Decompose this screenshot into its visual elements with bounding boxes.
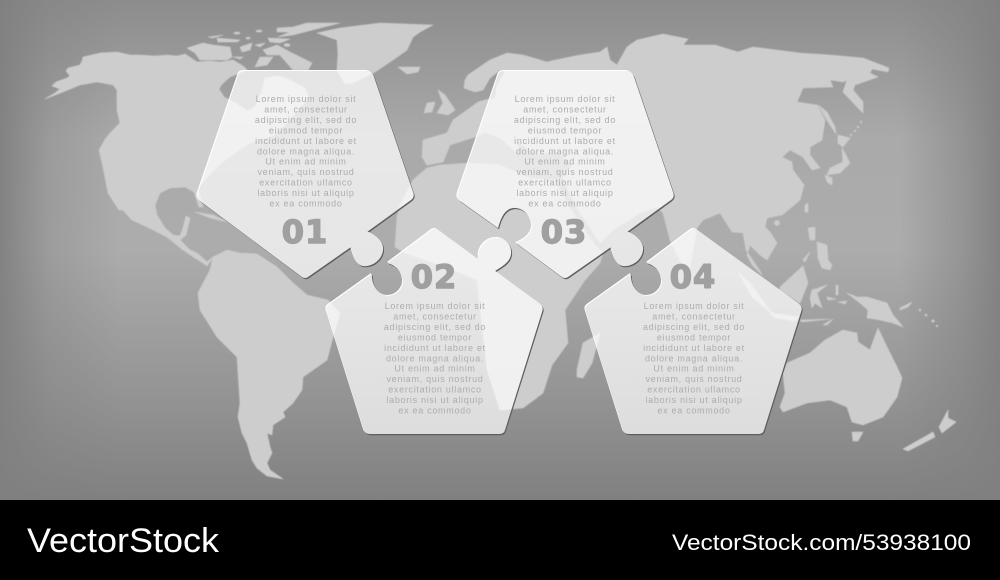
text block 02: ex ea commodo: [398, 406, 472, 416]
text block 03: ex ea commodo: [528, 198, 602, 208]
text block 01: amet, consectetur: [264, 104, 348, 114]
text block 03: Ut enim ad minim: [524, 157, 606, 167]
text block 04: eiusmod tempor: [657, 332, 731, 342]
text block 04: adipiscing elit, sed do: [643, 322, 745, 332]
puzzle piece 03: [456, 70, 675, 279]
text block 03: amet, consectetur: [523, 104, 607, 114]
text block 03: veniam, quis nostrud: [516, 167, 614, 177]
text block 02: incididunt ut labore et: [384, 343, 486, 353]
text block 01: laboris nisi ut aliquip: [257, 188, 355, 198]
map: Iceland: [398, 67, 420, 74]
map: Caribbean islands: [195, 212, 227, 222]
number 01: 01: [282, 213, 328, 251]
text block 04: laboris nisi ut aliquip: [645, 395, 743, 405]
text block 02: laboris nisi ut aliquip: [386, 395, 484, 405]
text block 02: amet, consectetur: [393, 311, 477, 321]
text block 02: adipiscing elit, sed do: [384, 322, 486, 332]
text block 03: laboris nisi ut aliquip: [516, 188, 614, 198]
text block 01: incididunt ut labore et: [255, 136, 357, 146]
text block 04: ex ea commodo: [657, 406, 731, 416]
text block 04: exercitation ullamco: [647, 385, 741, 395]
number 02: 02: [411, 258, 457, 296]
text block 01: eiusmod tempor: [269, 125, 343, 135]
puzzle piece 02: [325, 228, 544, 435]
text block 01: Lorem ipsum dolor sit: [256, 94, 356, 104]
text block 02: eiusmod tempor: [398, 332, 472, 342]
text block 01: Ut enim ad minim: [265, 157, 347, 167]
text block 04: Ut enim ad minim: [653, 364, 735, 374]
text block 02: Lorem ipsum dolor sit: [385, 301, 485, 311]
text block 04: veniam, quis nostrud: [645, 374, 743, 384]
text block 04: incididunt ut labore et: [643, 343, 745, 353]
map: Tasmania: [852, 432, 863, 441]
text block 02: Ut enim ad minim: [394, 364, 476, 374]
map: South America: [198, 250, 340, 479]
map: Australia: [780, 328, 902, 425]
map: North America: [45, 52, 309, 266]
text block 02: veniam, quis nostrud: [386, 374, 484, 384]
text block 01: exercitation ullamco: [259, 178, 353, 188]
footer brand: VectorStock: [27, 522, 220, 560]
map: Eurasia: [422, 34, 889, 277]
number 03: 03: [541, 213, 587, 251]
map: Canadian arctic islands: [187, 23, 340, 70]
number 04: 04: [670, 258, 716, 296]
text block 03: incididunt ut labore et: [514, 136, 616, 146]
map: Greenland: [317, 23, 433, 84]
footer image id: VectorStock.com/53938100: [672, 530, 971, 555]
puzzle piece 01: [196, 70, 415, 279]
map: Japan, Sakhalin and Kurils: [818, 105, 862, 185]
text block 01: veniam, quis nostrud: [257, 167, 355, 177]
text block 01: adipiscing elit, sed do: [255, 115, 357, 125]
text block 02: exercitation ullamco: [388, 385, 482, 395]
text block 04: dolore magna aliqua.: [645, 353, 743, 363]
text block 04: Lorem ipsum dolor sit: [644, 301, 744, 311]
map: Africa: [395, 163, 603, 410]
text block 01: ex ea commodo: [269, 198, 343, 208]
text block 03: dolore magna aliqua.: [516, 146, 614, 156]
footer bar: [0, 500, 1000, 580]
text block 03: eiusmod tempor: [528, 125, 602, 135]
text block 01: dolore magna aliqua.: [257, 146, 355, 156]
map: Madagascar: [577, 333, 600, 378]
text block 04: amet, consectetur: [652, 311, 736, 321]
map: British Isles: [424, 90, 455, 115]
text block 03: adipiscing elit, sed do: [514, 115, 616, 125]
puzzle piece 04: [584, 228, 803, 435]
text block 03: exercitation ullamco: [518, 178, 612, 188]
map: New Zealand: [903, 410, 956, 451]
text block 03: Lorem ipsum dolor sit: [515, 94, 615, 104]
world map: [45, 23, 956, 479]
text block 02: dolore magna aliqua.: [386, 353, 484, 363]
map: Southeast Asian islands: [738, 203, 938, 327]
